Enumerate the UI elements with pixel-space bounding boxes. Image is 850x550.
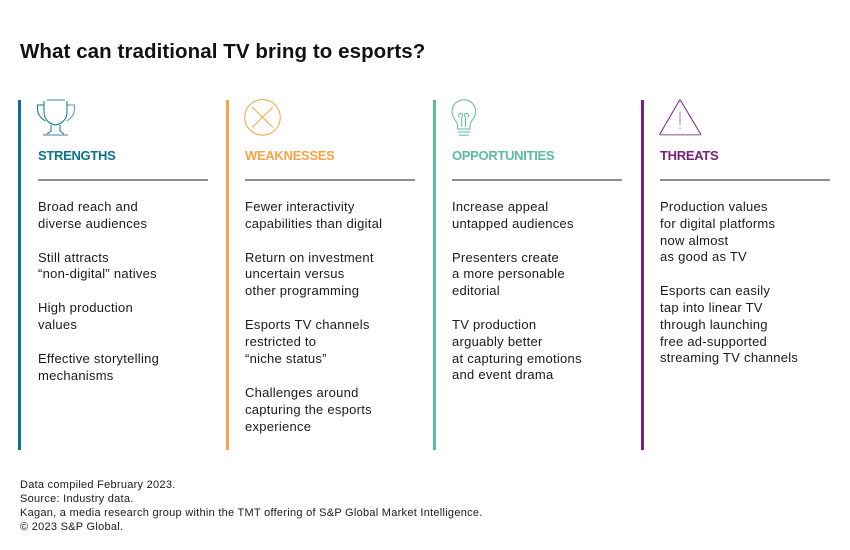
strengths text: diverse audiences <box>38 216 147 231</box>
strengths text: Effective storytelling <box>38 351 159 366</box>
threats text: through launching <box>660 317 768 332</box>
weaknesses text: capabilities than digital <box>245 216 382 231</box>
weaknesses text: Fewer interactivity <box>245 199 355 214</box>
threats text: for digital platforms <box>660 216 775 231</box>
weaknesses text <box>245 199 382 434</box>
footnotes: Source: Industry data. <box>20 493 134 505</box>
strengths text: Still attracts <box>38 250 109 265</box>
opportunities text: editorial <box>452 283 500 298</box>
weaknesses text: “niche status” <box>245 351 327 366</box>
strengths heading: STRENGTHS <box>38 148 115 163</box>
panel: opportunities <box>433 99 622 450</box>
icon: trophy <box>37 99 75 136</box>
opportunities accent bar <box>433 100 436 450</box>
strengths text: Broad reach and <box>38 199 138 214</box>
opportunities text: and event drama <box>452 367 553 382</box>
weaknesses text: Esports TV channels <box>245 317 370 332</box>
weaknesses accent bar <box>226 100 229 450</box>
icon: crossed circle <box>244 99 281 136</box>
title: What can traditional TV bring to esports? <box>20 40 425 63</box>
threats text: tap into linear TV <box>660 300 763 315</box>
opportunities text: at capturing emotions <box>452 351 582 366</box>
panel: strengths <box>18 99 208 450</box>
opportunities text: Increase appeal <box>452 199 548 214</box>
opportunities text: Presenters create <box>452 250 559 265</box>
opportunities text <box>452 199 582 382</box>
threats text <box>660 199 798 365</box>
strengths text: High production <box>38 300 133 315</box>
opportunities heading: OPPORTUNITIES <box>452 148 554 163</box>
weaknesses text: uncertain versus <box>245 266 345 281</box>
threats text: as good as TV <box>660 249 747 264</box>
threats heading: THREATS <box>660 148 718 163</box>
footnotes: Data compiled February 2023. <box>20 479 176 491</box>
threats text: free ad-supported <box>660 334 767 349</box>
strengths accent bar <box>18 100 21 450</box>
weaknesses text: Challenges around <box>245 385 359 400</box>
threats text: streaming TV channels <box>660 350 798 365</box>
opportunities text: a more personable <box>452 266 565 281</box>
footnotes: © 2023 S&P Global. <box>20 521 123 533</box>
weaknesses text: experience <box>245 419 311 434</box>
strengths text <box>38 199 159 383</box>
strengths text: “non-digital” natives <box>38 266 157 281</box>
opportunities text: untapped audiences <box>452 216 574 231</box>
panel: weaknesses <box>226 99 415 450</box>
weaknesses text: capturing the esports <box>245 402 372 417</box>
threats accent bar <box>641 100 644 450</box>
threats text: Esports can easily <box>660 283 770 298</box>
footnotes <box>20 479 483 533</box>
strengths text: mechanisms <box>38 368 114 383</box>
footnotes: Kagan, a media research group within the TMT offering of S&P Global Market Intelligence. <box>20 507 483 519</box>
icon: light bulb <box>452 99 476 136</box>
weaknesses text: other programming <box>245 283 359 298</box>
weaknesses text: Return on investment <box>245 250 374 265</box>
threats text: now almost <box>660 233 728 248</box>
weaknesses heading: WEAKNESSES <box>245 148 334 163</box>
weaknesses text: restricted to <box>245 334 316 349</box>
opportunities text: TV production <box>452 317 536 332</box>
threats text: Production values <box>660 199 768 214</box>
opportunities text: arguably better <box>452 334 543 349</box>
strengths text: values <box>38 317 77 332</box>
icon: warning triangle <box>659 99 702 136</box>
